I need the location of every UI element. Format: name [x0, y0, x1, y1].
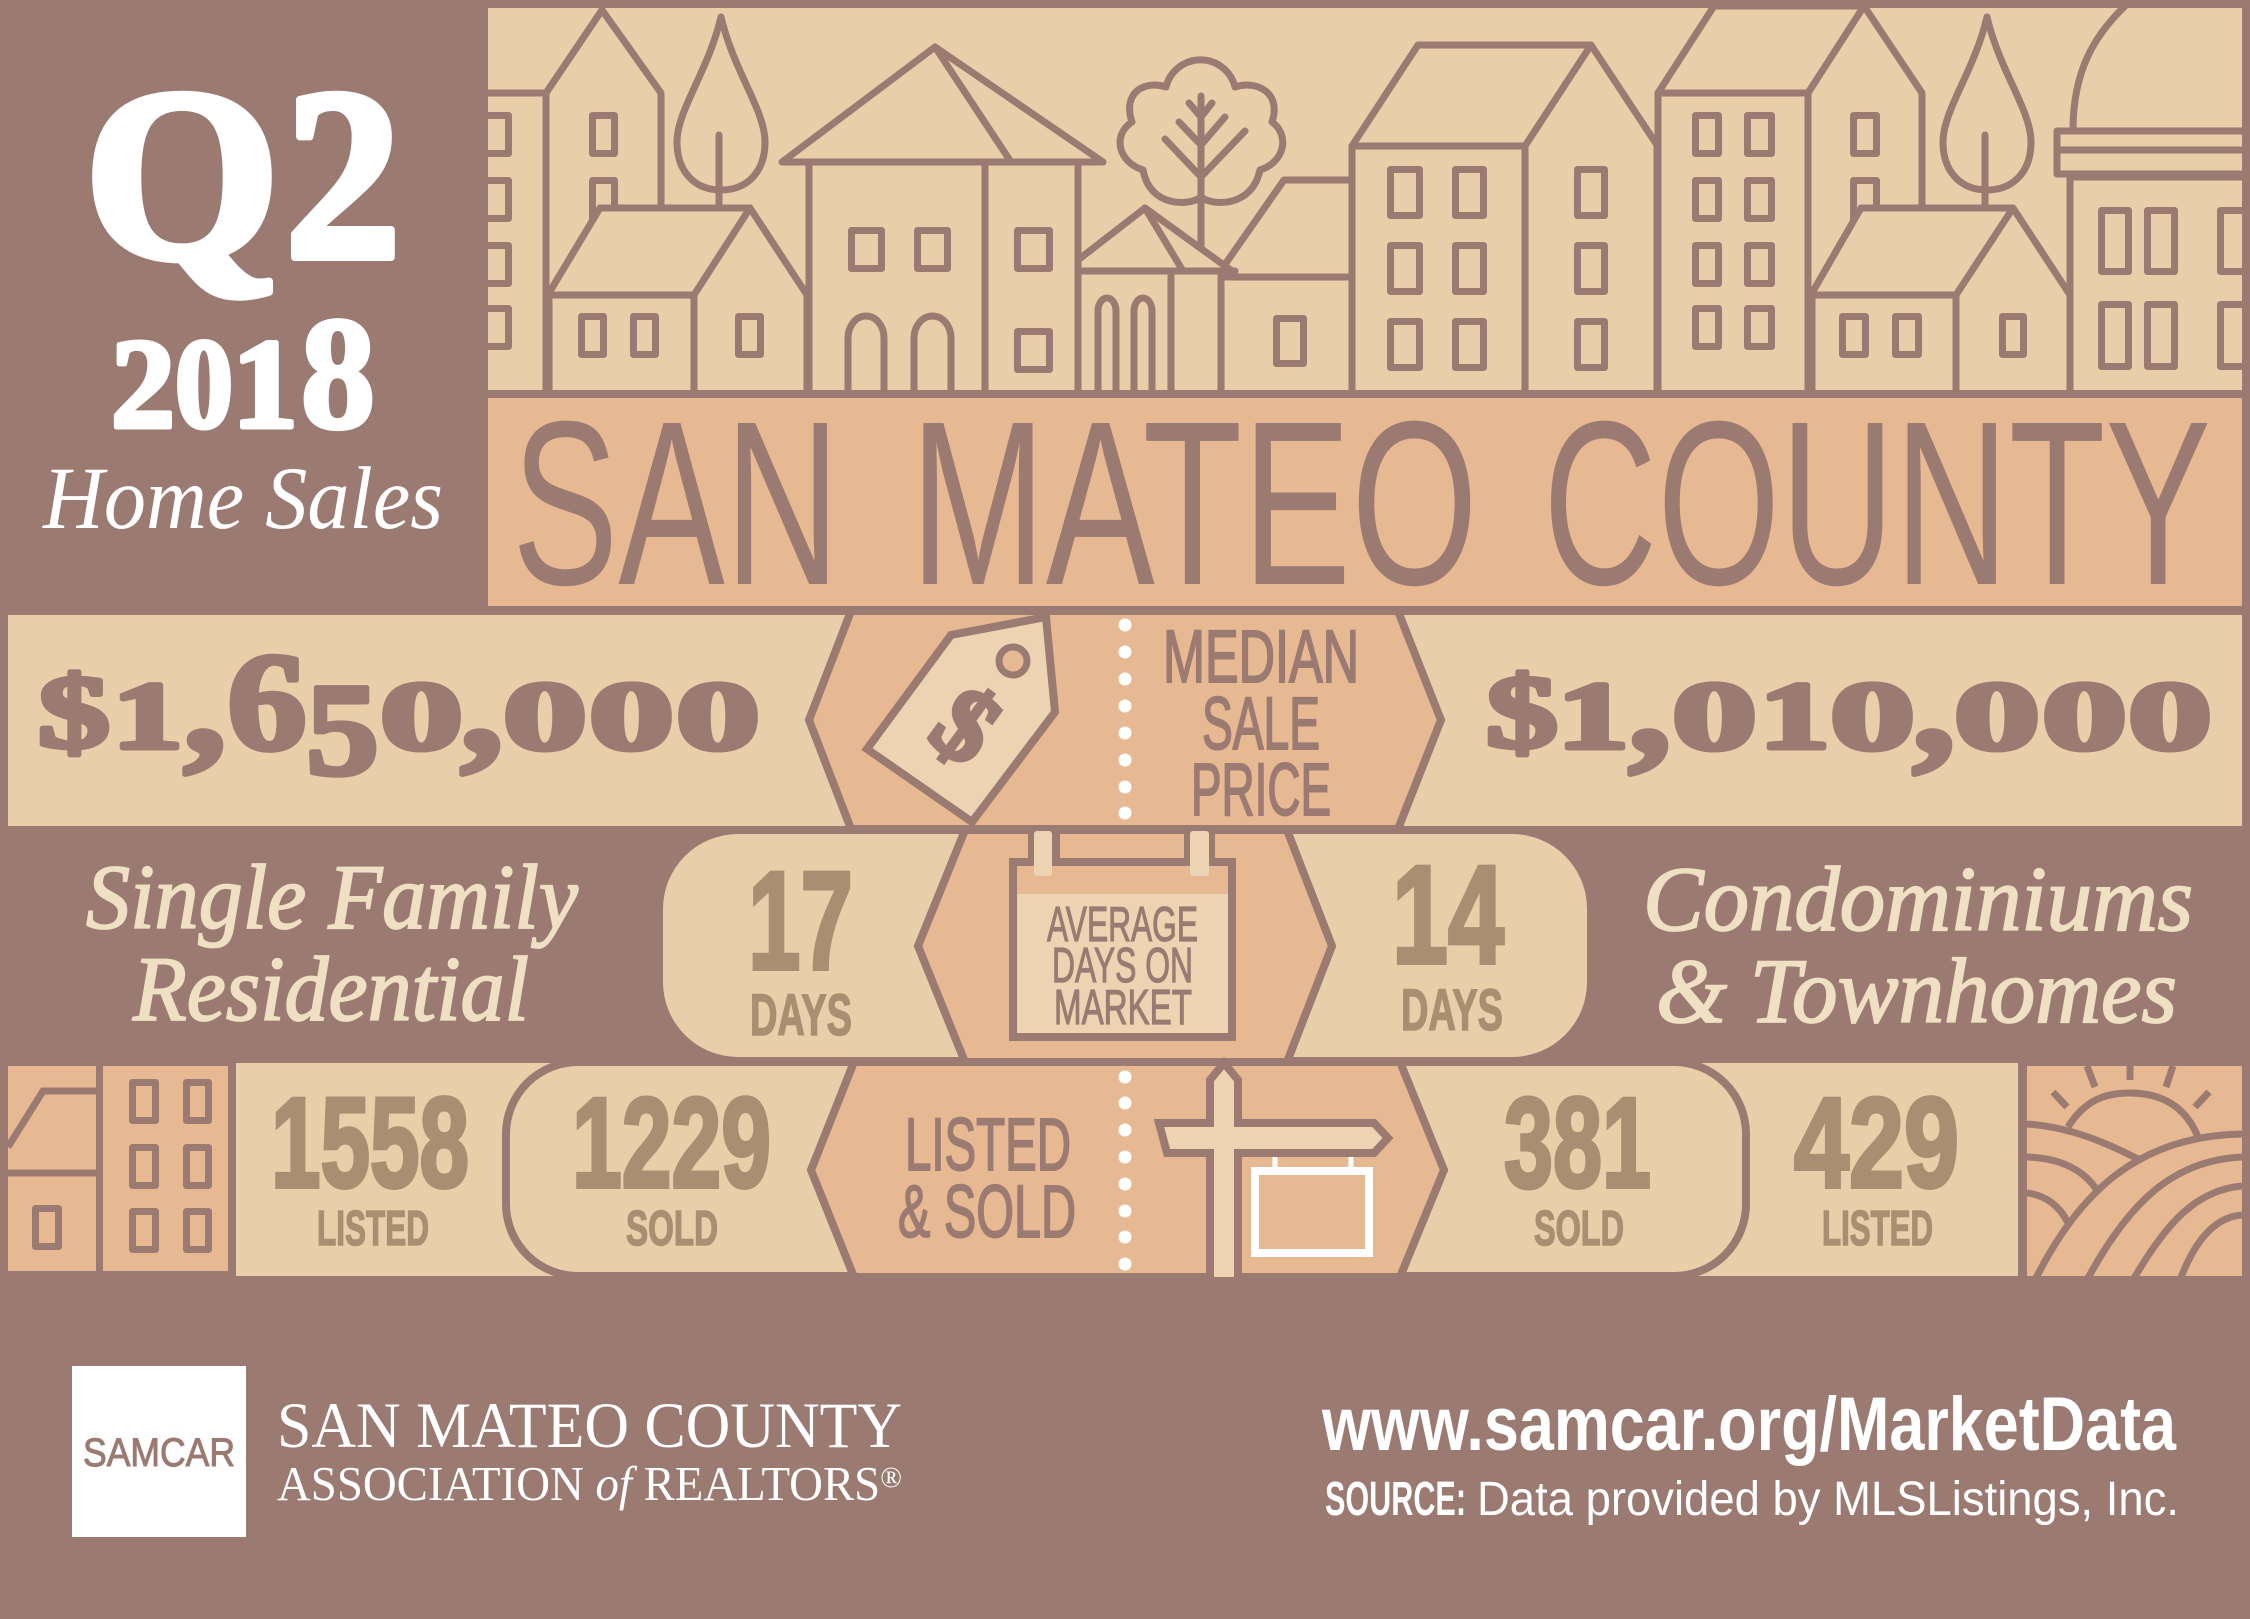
value: 17 days: 17 [748, 842, 853, 999]
building: left tower [470, 10, 661, 400]
divider: dotted line [1118, 618, 1132, 820]
heading: 2018: 2 [111, 313, 175, 455]
hexagon: listed and sold [811, 1062, 1444, 1280]
text: San Mateo County Association of Realtors: ® [880, 1461, 902, 1494]
icon: price tag: $ [911, 664, 1021, 787]
building: central house [782, 47, 1103, 400]
label: Average Days on Market [1047, 898, 1198, 1035]
text: Single Family Residential: Residential [132, 938, 529, 1040]
label: Median Sale Price: SALE [1202, 682, 1320, 765]
value: 1229 sold: 1229 [572, 1072, 771, 1215]
value: 17 days: DAYS [750, 983, 852, 1048]
label: Average Days on Market: AVERAGE [1047, 898, 1198, 952]
value: condominium median price: 1 [1557, 662, 1629, 769]
pill: left days [663, 834, 1063, 1057]
value: 429 listed [1794, 1072, 1959, 1256]
value: 14 days [1392, 836, 1504, 1043]
frame lines of skyline panel [480, 4, 488, 394]
icon: cypress tree [677, 17, 765, 210]
text: San Mateo County Association of Realtors [277, 1390, 902, 1511]
value: single family median price: 5 [306, 656, 379, 803]
hexagon: average days on market [918, 830, 1332, 1062]
value: single family median price: 6 [227, 625, 307, 780]
building: tall house [1352, 45, 1657, 400]
heading: Q2: Q [84, 39, 280, 310]
text: Condominiums and Townhomes [1643, 848, 2193, 1042]
value: condominium median price: 0 [1830, 663, 1915, 771]
banner: San Mateo County [488, 372, 2242, 634]
icon: round tree [1120, 60, 1283, 250]
value: 1229 sold [572, 1072, 771, 1256]
icon: real estate sign [1159, 1063, 1388, 1280]
value: 17 days [748, 842, 853, 1048]
value: single family median price: , [460, 624, 504, 784]
value: 429 listed: 429 [1794, 1072, 1959, 1215]
logo: SAMCAR: SAMCAR [83, 1431, 235, 1475]
value: single family median price: 0 [503, 663, 587, 771]
value: condominium median price: 0 [1954, 663, 2040, 771]
heading: San Mateo County: MATEO [910, 372, 1478, 634]
value: 14 days: 14 [1392, 836, 1504, 993]
text: Condominiums and Townhomes: & Townhomes [1656, 940, 2177, 1042]
value: single family median price: 1 [112, 662, 183, 769]
value: 1558 listed [271, 1072, 469, 1256]
value: condominium median price: , [1628, 624, 1672, 784]
label: Median Sale Price [1163, 615, 1359, 831]
value: condominium median price: 0 [1672, 663, 1757, 771]
building: low house [1224, 176, 1348, 367]
value: condominium median price: 1 [1759, 662, 1830, 769]
text: source: Data provided by MLSListings, Inc. [1477, 1473, 2179, 1526]
heading: 2018: 1 [232, 313, 298, 455]
heading: 2018: 8 [301, 284, 375, 462]
divider: dotted line [1118, 1070, 1132, 1270]
value: single family median price: 0 [676, 663, 760, 771]
icon: houses panel [8, 1066, 228, 1271]
building: domed tower [2054, 8, 2242, 370]
panel: average days row [86, 834, 2193, 1057]
text: San Mateo County Association of Realtors: SAN MATEO COUNTY [277, 1390, 902, 1462]
building: small gabled house [1078, 208, 1235, 400]
value: condominium median price: 0 [2042, 663, 2127, 771]
building: right tower [1658, 6, 1922, 400]
text: Single Family Residential: Single Family [86, 846, 578, 948]
text: source: SOURCE: [1325, 1473, 1466, 1526]
label: Listed and Sold [898, 1103, 1076, 1253]
icon: sun over hills [2027, 1066, 2242, 1280]
subheading: Home Sales: Home Sales [42, 450, 443, 548]
panel: listed and sold row [236, 1062, 2018, 1276]
title: Q2 2018 Home Sales [42, 39, 443, 548]
icon: cypress tree right [1943, 17, 2031, 210]
label: Listed and Sold: LISTED [905, 1103, 1071, 1186]
value: 381 sold [1504, 1072, 1651, 1256]
text: Single Family Residential [86, 846, 578, 1040]
label: Average Days on Market: DAYS ON [1052, 939, 1193, 993]
value: condominium median price: 0 [2128, 663, 2212, 771]
hexagon: median sale price [809, 611, 1441, 831]
label: Average Days on Market: MARKET [1054, 981, 1192, 1035]
value: 381 sold: 381 [1504, 1072, 1651, 1215]
value: single family median price: $ [38, 655, 110, 770]
pill outline: sold figures [506, 1062, 1746, 1276]
panel: median sale price row [8, 615, 2242, 826]
value: single family median price: , [183, 624, 227, 784]
label: Listed and Sold: & SOLD [898, 1170, 1076, 1253]
value: 429 listed: LISTED [1822, 1202, 1933, 1256]
text: San Mateo County Association of Realtors: ASSOCIATION of REALTORS [277, 1456, 892, 1511]
heading: 2018: 0 [175, 313, 233, 455]
label: Median Sale Price: PRICE [1191, 748, 1331, 831]
value: condominium median price: $ [1486, 655, 1558, 770]
building: front house left [549, 208, 807, 400]
value: 1558 listed: LISTED [317, 1202, 429, 1256]
label: Median Sale Price: MEDIAN [1163, 615, 1359, 698]
text: Condominiums and Townhomes: Condominiums [1643, 848, 2193, 950]
heading: Q2: 2 [285, 39, 401, 310]
value: 1229 sold: SOLD [626, 1202, 718, 1256]
value: 1558 listed: 1558 [271, 1072, 469, 1215]
building: front house right [1812, 208, 2070, 400]
logo: SAMCAR [72, 1366, 246, 1537]
value: single family median price: 0 [380, 663, 463, 771]
value: 381 sold: SOLD [1534, 1202, 1624, 1256]
pill: right days [1187, 834, 1587, 1057]
value: 14 days: DAYS [1401, 978, 1503, 1043]
icon: calendar [1013, 831, 1232, 1037]
panel: town skyline illustration [470, 6, 2250, 400]
heading: San Mateo County: SAN [512, 372, 840, 634]
value: condominium median price: , [1912, 624, 1956, 784]
value: single family median price: 0 [589, 663, 674, 771]
icon: price tag [867, 617, 1055, 822]
